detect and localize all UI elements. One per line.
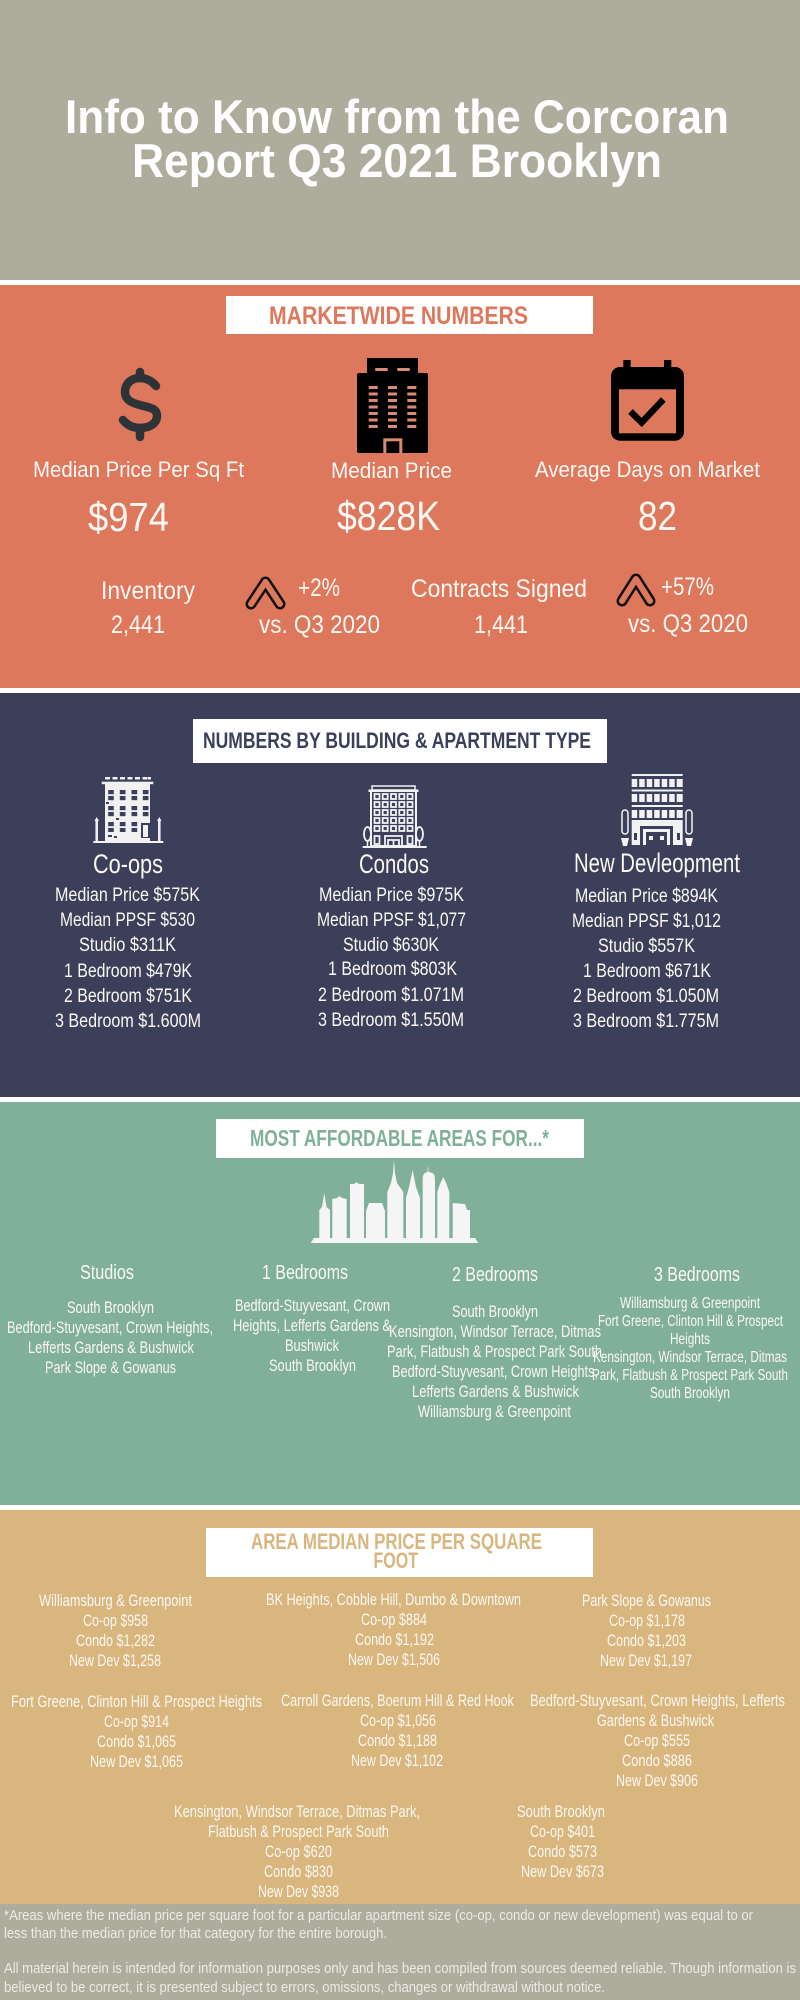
column: co-ops: Median PPSF $530 <box>60 910 195 931</box>
column: new development: New Devleopment <box>574 848 740 878</box>
column: co-ops <box>55 849 201 1032</box>
area: Bedford-Stuyvesant, Crown Heights, Lefferts Gardens and Bushwick <box>530 1691 785 1790</box>
column: 1 bedrooms <box>233 1262 391 1375</box>
column: co-ops: Co-ops <box>93 849 163 879</box>
panel: numbers by building and apartment type <box>0 693 800 1097</box>
stat: inventory: Inventory <box>101 577 195 605</box>
column: 1 bedrooms: South Brooklyn <box>269 1356 356 1375</box>
area: Williamsburg and Greenpoint: Co-op $958 <box>83 1611 148 1630</box>
column: 2 bedrooms: 2 Bedrooms <box>452 1264 538 1286</box>
column: condos: Condos <box>359 849 429 879</box>
column: 3 bedrooms: Williamsburg & Greenpoint <box>620 1295 761 1312</box>
heading: most affordable areas <box>216 1119 584 1158</box>
stat: median price: Median Price <box>331 458 452 483</box>
column: 3 bedrooms <box>592 1264 788 1402</box>
stat: median price per sq ft <box>33 457 244 540</box>
change: contracts year over year: vs. Q3 2020 <box>628 610 748 638</box>
stat: contracts signed <box>411 575 587 639</box>
area: South Brooklyn: South Brooklyn <box>517 1802 605 1821</box>
area: Kensington, Windsor Terrace, Ditmas Park, Flatbush and Prospect Park South: Co-op $620 <box>265 1842 332 1861</box>
column: condos: 3 Bedroom $1.550M <box>318 1010 464 1031</box>
panel: footnotes <box>0 1904 800 2000</box>
footnote: affordable areas definition: less than the median price for that category for the entire borough. <box>4 1925 387 1942</box>
area: Carroll Gardens, Boerum Hill and Red Hook <box>281 1691 514 1770</box>
area: Carroll Gardens, Boerum Hill and Red Hook: Carroll Gardens, Boerum Hill & Red Hook <box>281 1691 514 1710</box>
column: new development: 2 Bedroom $1.050M <box>573 986 719 1007</box>
area: Williamsburg and Greenpoint: New Dev $1,258 <box>69 1651 161 1670</box>
change: inventory year over year <box>259 574 380 639</box>
area: Park Slope and Gowanus <box>582 1591 711 1670</box>
panel: title banner <box>0 0 800 280</box>
column: 1 bedrooms: Bushwick <box>285 1336 339 1355</box>
heading: area median price per square foot <box>206 1528 593 1577</box>
panel: area median price per square foot <box>0 1510 800 1904</box>
heading: numbers by building type: NUMBERS BY BUILDING & APARTMENT TYPE <box>203 728 591 753</box>
area: South Brooklyn <box>517 1802 605 1881</box>
area: Park Slope and Gowanus: Park Slope & Gowanus <box>582 1591 711 1610</box>
column: 3 bedrooms: Heights <box>670 1331 710 1348</box>
heading: area median price per square foot: FOOT <box>374 1548 418 1573</box>
column: condos: Median Price $975K <box>319 885 464 906</box>
column: new development: 1 Bedroom $671K <box>583 961 711 982</box>
stat: median price <box>331 458 452 539</box>
column: condos <box>317 849 466 1031</box>
stat: average days on market <box>535 457 760 539</box>
area: Fort Greene, Clinton Hill and Prospect Heights: Condo $1,065 <box>97 1732 176 1751</box>
area: Bedford-Stuyvesant, Crown Heights, Lefferts Gardens and Bushwick: Gardens & Bushwick <box>597 1711 714 1730</box>
title: Info to Know from the Corcoran <box>65 90 729 143</box>
icon: co-op building <box>93 777 163 843</box>
area: Kensington, Windsor Terrace, Ditmas Park, Flatbush and Prospect Park South <box>174 1802 420 1901</box>
column: co-ops: 3 Bedroom $1.600M <box>55 1011 201 1032</box>
stat: median price per sq ft: Median Price Per Sq Ft <box>33 457 244 482</box>
area: BK Heights, Cobble Hill, Dumbo and Downtown: New Dev $1,506 <box>348 1650 440 1669</box>
area: Bedford-Stuyvesant, Crown Heights, Lefferts Gardens and Bushwick: Co-op $555 <box>624 1731 690 1750</box>
column: co-ops: 2 Bedroom $751K <box>64 986 192 1007</box>
area: Fort Greene, Clinton Hill and Prospect Heights: New Dev $1,065 <box>90 1752 183 1771</box>
stat: average days on market: Average Days on Market <box>535 457 760 482</box>
area: Carroll Gardens, Boerum Hill and Red Hook: Condo $1,188 <box>358 1731 437 1750</box>
column: studios: Lefferts Gardens & Bushwick <box>28 1338 194 1357</box>
column: studios: Park Slope & Gowanus <box>45 1358 176 1377</box>
area: BK Heights, Cobble Hill, Dumbo and Downtown <box>266 1590 521 1669</box>
column: 2 bedrooms: South Brooklyn <box>452 1302 538 1321</box>
column: condos: 1 Bedroom $803K <box>328 959 457 980</box>
title: Report Q3 2021 Brooklyn <box>132 134 662 187</box>
footnote: disclaimer <box>4 1960 796 1996</box>
stat: inventory <box>101 577 195 639</box>
icon: inventory up arrow <box>251 582 280 604</box>
area: Bedford-Stuyvesant, Crown Heights, Lefferts Gardens and Bushwick: New Dev $906 <box>616 1771 698 1790</box>
heading: marketwide numbers <box>226 296 593 334</box>
column: 2 bedrooms: Williamsburg & Greenpoint <box>418 1402 571 1421</box>
stat: inventory: 2,441 <box>111 611 165 639</box>
area: BK Heights, Cobble Hill, Dumbo and Downtown: Co-op $884 <box>361 1610 427 1629</box>
column: co-ops: Studio $311K <box>79 935 176 956</box>
heading: area median price per square foot: AREA MEDIAN PRICE PER SQUARE <box>251 1529 542 1554</box>
icon: condo building <box>363 786 427 848</box>
area: Kensington, Windsor Terrace, Ditmas Park, Flatbush and Prospect Park South: Condo $830 <box>264 1862 333 1881</box>
column: 2 bedrooms: Kensington, Windsor Terrace, Ditmas <box>389 1322 601 1341</box>
column: studios <box>7 1262 213 1377</box>
area: BK Heights, Cobble Hill, Dumbo and Downtown: Condo $1,192 <box>355 1630 434 1649</box>
stat: contracts signed: Contracts Signed <box>411 575 587 603</box>
change: contracts year over year: +57% <box>661 573 714 601</box>
column: condos: Studio $630K <box>343 935 439 956</box>
heading: marketwide numbers: MARKETWIDE NUMBERS <box>269 302 528 330</box>
area: Carroll Gardens, Boerum Hill and Red Hook: New Dev $1,102 <box>351 1751 443 1770</box>
column: co-ops: 1 Bedroom $479K <box>64 961 192 982</box>
column: 1 bedrooms: Bedford-Stuyvesant, Crown <box>235 1296 390 1315</box>
stat: median price per sq ft: $974 <box>88 494 169 540</box>
column: new development: Median PPSF $1,012 <box>572 911 721 932</box>
area: Bedford-Stuyvesant, Crown Heights, Lefferts Gardens and Bushwick: Condo $886 <box>622 1751 692 1770</box>
column: studios: South Brooklyn <box>67 1298 154 1317</box>
area: Park Slope and Gowanus: Condo $1,203 <box>607 1631 686 1650</box>
area: Kensington, Windsor Terrace, Ditmas Park, Flatbush and Prospect Park South: Flatbush & Prospect Park South <box>208 1822 389 1841</box>
column: 2 bedrooms: Park, Flatbush & Prospect Park South <box>387 1342 602 1361</box>
area: Fort Greene, Clinton Hill and Prospect Heights: Co-op $914 <box>104 1712 169 1731</box>
area: Park Slope and Gowanus: Co-op $1,178 <box>609 1611 685 1630</box>
column: 2 bedrooms: Bedford-Stuyvesant, Crown Heights, <box>392 1362 598 1381</box>
icon: dollar sign <box>123 372 157 437</box>
column: condos: 2 Bedroom $1.071M <box>318 985 464 1006</box>
column: condos: Median PPSF $1,077 <box>317 910 466 931</box>
column: 1 bedrooms: 1 Bedrooms <box>262 1262 348 1284</box>
change: inventory year over year: vs. Q3 2020 <box>259 611 380 639</box>
area: Fort Greene, Clinton Hill and Prospect Heights <box>11 1692 262 1771</box>
panel: marketwide numbers <box>0 285 800 688</box>
area: Williamsburg and Greenpoint <box>39 1591 192 1670</box>
icon: contracts up arrow <box>622 579 650 601</box>
area: South Brooklyn: Co-op $401 <box>530 1822 595 1841</box>
column: 3 bedrooms: South Brooklyn <box>650 1385 730 1402</box>
area: Kensington, Windsor Terrace, Ditmas Park, Flatbush and Prospect Park South: New Dev $938 <box>258 1882 339 1901</box>
area: Carroll Gardens, Boerum Hill and Red Hook: Co-op $1,056 <box>360 1711 436 1730</box>
area: South Brooklyn: Condo $573 <box>528 1842 597 1861</box>
panel: most affordable areas <box>0 1102 800 1505</box>
column: studios: Studios <box>80 1262 134 1284</box>
icon: calendar with check <box>611 360 684 441</box>
area: Williamsburg and Greenpoint: Williamsburg & Greenpoint <box>39 1591 192 1610</box>
stat: contracts signed: 1,441 <box>474 611 528 639</box>
change: inventory year over year: +2% <box>298 574 340 602</box>
footnote: disclaimer: believed to be correct, it is presented subject to errors, omissions, changes or withdrawal without notice. <box>4 1979 605 1996</box>
stat: median price: $828K <box>337 493 440 539</box>
area: Fort Greene, Clinton Hill and Prospect Heights: Fort Greene, Clinton Hill & Prospect Heights <box>11 1692 262 1711</box>
heading: numbers by building type <box>193 719 607 763</box>
column: studios: Bedford-Stuyvesant, Crown Heights, <box>7 1318 213 1337</box>
area: Kensington, Windsor Terrace, Ditmas Park, Flatbush and Prospect Park South: Kensington, Windsor Terrace, Ditmas Park, <box>174 1802 420 1821</box>
column: 2 bedrooms <box>387 1264 602 1421</box>
column: new development <box>572 848 740 1032</box>
column: new development: Studio $557K <box>598 936 695 957</box>
column: 2 bedrooms: Lefferts Gardens & Bushwick <box>412 1382 579 1401</box>
change: contracts year over year <box>628 573 748 638</box>
stat: average days on market: 82 <box>638 493 677 539</box>
column: 1 bedrooms: Heights, Lefferts Gardens & <box>233 1316 391 1335</box>
icon: office building <box>357 358 428 453</box>
heading: most affordable areas: MOST AFFORDABLE AREAS FOR...* <box>250 1125 549 1151</box>
area: Park Slope and Gowanus: New Dev $1,197 <box>600 1651 692 1670</box>
area: South Brooklyn: New Dev $673 <box>521 1862 604 1881</box>
icon: new development building <box>621 774 693 846</box>
icon: city skyline <box>311 1160 478 1243</box>
column: 3 bedrooms: 3 Bedrooms <box>654 1264 740 1286</box>
column: co-ops: Median Price $575K <box>55 885 200 906</box>
column: new development: Median Price $894K <box>575 886 718 907</box>
column: new development: 3 Bedroom $1.775M <box>573 1011 719 1032</box>
footnote: affordable areas definition <box>4 1907 753 1942</box>
area: BK Heights, Cobble Hill, Dumbo and Downtown: BK Heights, Cobble Hill, Dumbo & Downtown <box>266 1590 521 1609</box>
area: Williamsburg and Greenpoint: Condo $1,282 <box>76 1631 155 1650</box>
title <box>65 90 729 187</box>
